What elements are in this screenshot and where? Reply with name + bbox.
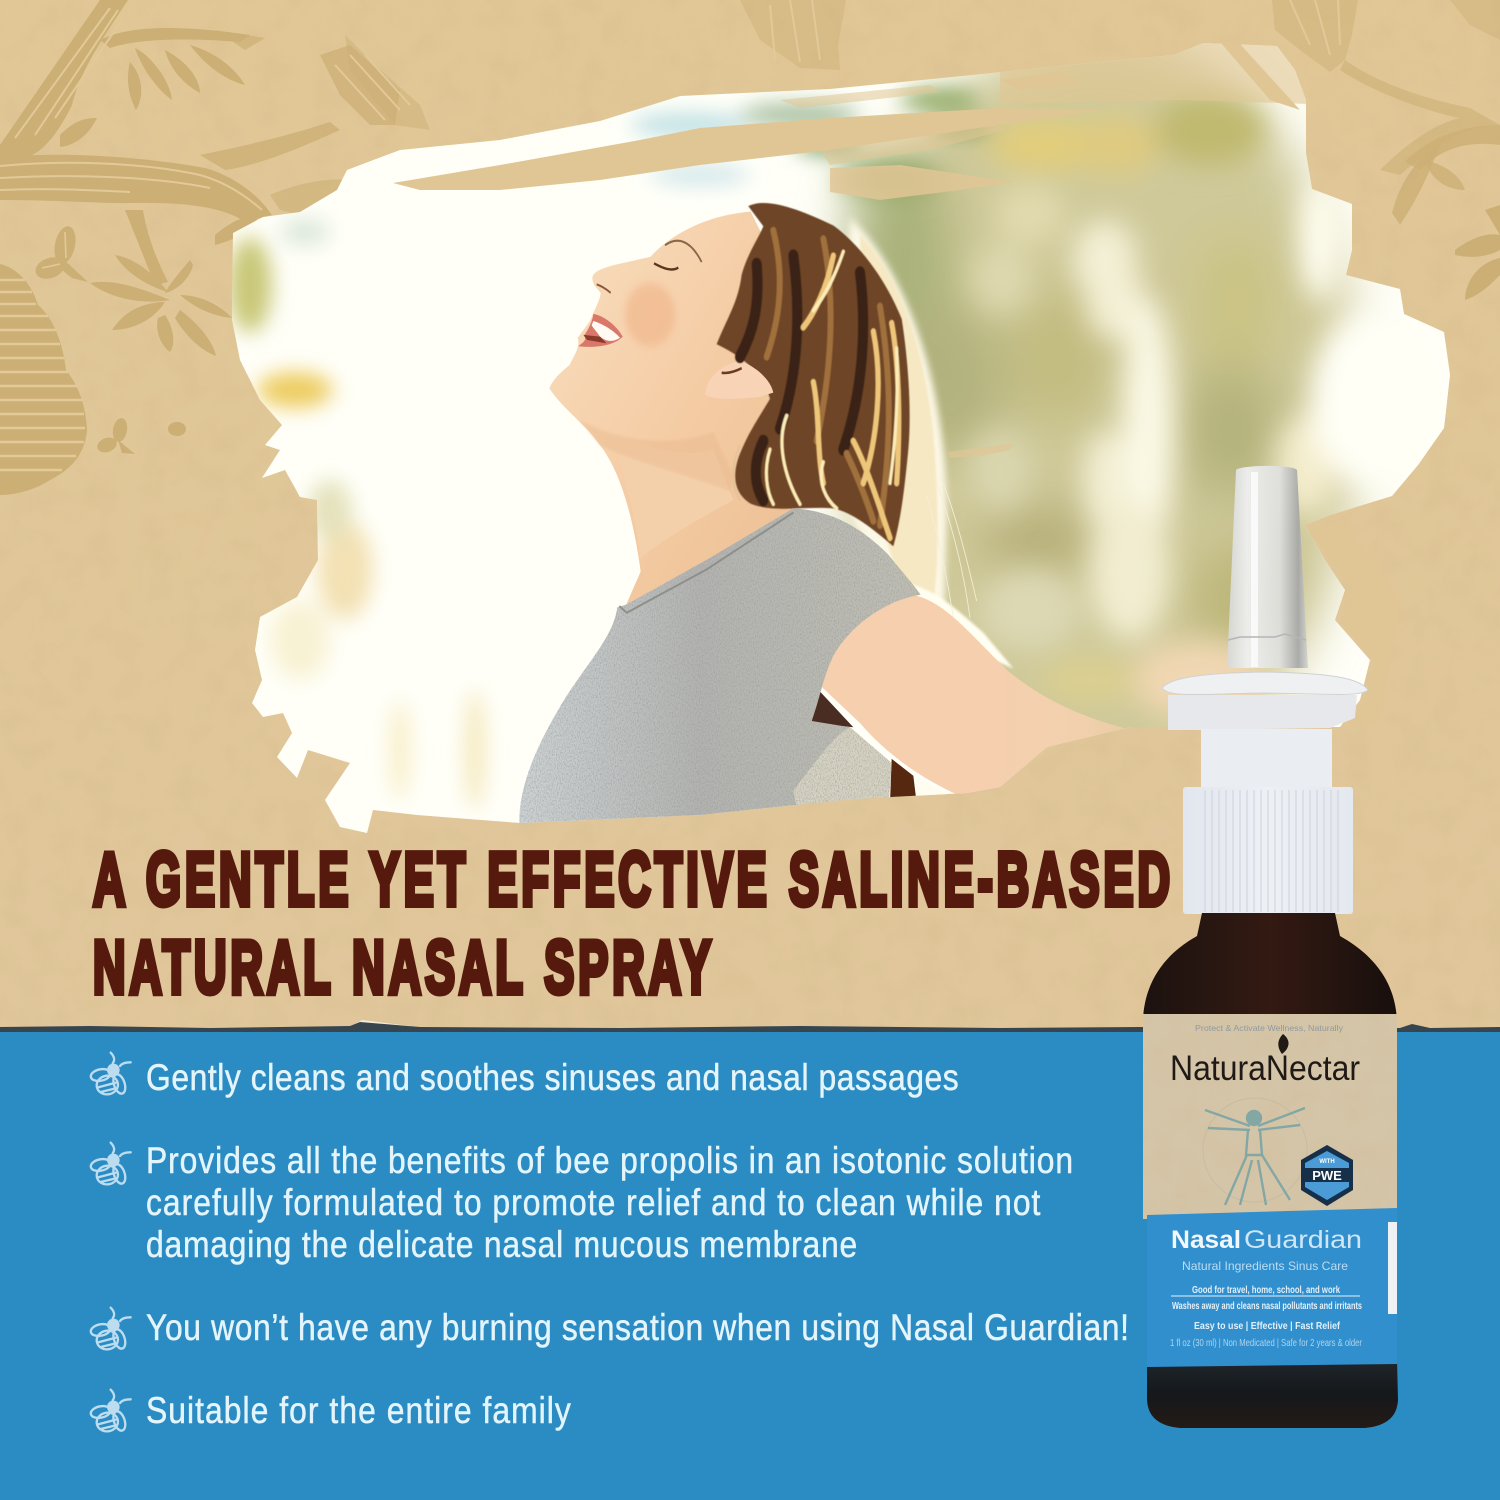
label small print <box>1170 1284 1362 1349</box>
label <box>1143 1014 1397 1367</box>
bullet 1: Gently cleans and soothes sinuses and nasal passages <box>146 1058 959 1099</box>
label side panel text <box>1388 1222 1397 1314</box>
photo of woman in brush-stroke mask <box>200 30 1500 850</box>
glow behind head <box>846 218 951 602</box>
white arm glow <box>910 584 1013 668</box>
torn blue panel edge <box>0 1020 1500 1040</box>
bullet 2: carefully formulated to promote relief and to clean while not <box>146 1183 1041 1224</box>
blond outer hair <box>860 235 938 601</box>
icon: bee <box>90 1143 131 1186</box>
PWE badge: PWE <box>1312 1168 1342 1183</box>
product name: Nasal <box>1171 1226 1241 1254</box>
product name: Guardian <box>1244 1226 1362 1254</box>
blurred sunny background <box>200 30 1500 850</box>
engraved small bees <box>95 417 186 455</box>
icon: bee <box>90 1390 131 1433</box>
label small print: Good for travel, home, school, and work <box>1192 1284 1340 1296</box>
neck shading <box>637 473 733 558</box>
engraved bee <box>32 224 88 283</box>
nozzle tip <box>1227 466 1308 668</box>
paper brush strokes over photo <box>393 42 1400 730</box>
heading: NATURAL NASAL SPRAY <box>93 926 711 1010</box>
nozzle flange <box>1162 672 1368 730</box>
grey t-shirt <box>519 508 921 824</box>
white triangle under arm <box>916 794 947 796</box>
bullet 4: Suitable for the entire family <box>146 1391 572 1432</box>
ear <box>705 361 773 399</box>
subtitle: Natural Ingredients Sinus Care <box>1182 1259 1348 1273</box>
heading <box>93 838 1170 1010</box>
PWE badge: WITH <box>1319 1159 1335 1165</box>
tree and bee engraving background <box>0 0 1500 495</box>
heading: A GENTLE YET EFFECTIVE SALINE-BASED <box>93 838 1170 922</box>
label small print: Washes away and cleans nasal pollutants and irritants <box>1172 1300 1362 1312</box>
hair shadows and highlights <box>733 231 899 538</box>
white collar <box>1201 729 1332 789</box>
eye and brow <box>654 241 702 269</box>
amber glass shoulder <box>1143 913 1397 1020</box>
icon: bee <box>90 1308 131 1351</box>
bullet list <box>90 1053 1129 1433</box>
cheek blush <box>625 283 675 346</box>
hair mass <box>717 203 910 546</box>
bullet 2: Provides all the benefits of bee propolis in an isotonic solution <box>146 1141 1073 1182</box>
label upper kraft section <box>1143 1014 1397 1219</box>
engraved leaf clusters <box>90 30 1500 356</box>
brand name: NaturaNectar <box>1170 1049 1360 1088</box>
brand name <box>1170 1034 1360 1088</box>
streaky top of brush stroke <box>1000 40 1310 104</box>
loose hair strands <box>927 475 977 618</box>
bullet 3: You won’t have any burning sensation when using Nasal Guardian! <box>146 1308 1129 1349</box>
mouth <box>578 314 623 347</box>
engraved main branch <box>0 0 345 285</box>
bullet 2 <box>90 1141 1073 1266</box>
product bottle <box>1143 466 1398 1428</box>
PWE badge <box>1301 1145 1353 1206</box>
ribbed cap <box>1183 787 1353 914</box>
glass bottom <box>1147 1360 1398 1428</box>
label small print: Easy to use | Effective | Fast Relief <box>1194 1320 1340 1332</box>
vitruvian figure <box>1203 1098 1307 1205</box>
engraved right and top branches <box>740 0 1500 175</box>
engraved beehive <box>0 264 87 495</box>
arm <box>822 596 1124 794</box>
blue benefits panel <box>0 1032 1500 1500</box>
label lower blue section <box>1147 1208 1397 1367</box>
dark hair patch under arm <box>890 758 916 798</box>
dark gap under sleeve <box>812 692 854 728</box>
tagline: Protect & Activate Wellness, Naturally <box>1195 1023 1344 1033</box>
nostril <box>597 284 611 293</box>
head and neck skin <box>549 212 793 607</box>
icon: bee <box>90 1053 131 1096</box>
product name <box>1171 1226 1362 1254</box>
label small print: 1 fl oz (30 ml) | Non Medicated | Safe for 2 years & older <box>1170 1337 1362 1349</box>
bullet 2: damaging the delicate nasal mucous membrane <box>146 1225 857 1266</box>
woman, traced in scaled coordinates <box>519 203 1130 824</box>
